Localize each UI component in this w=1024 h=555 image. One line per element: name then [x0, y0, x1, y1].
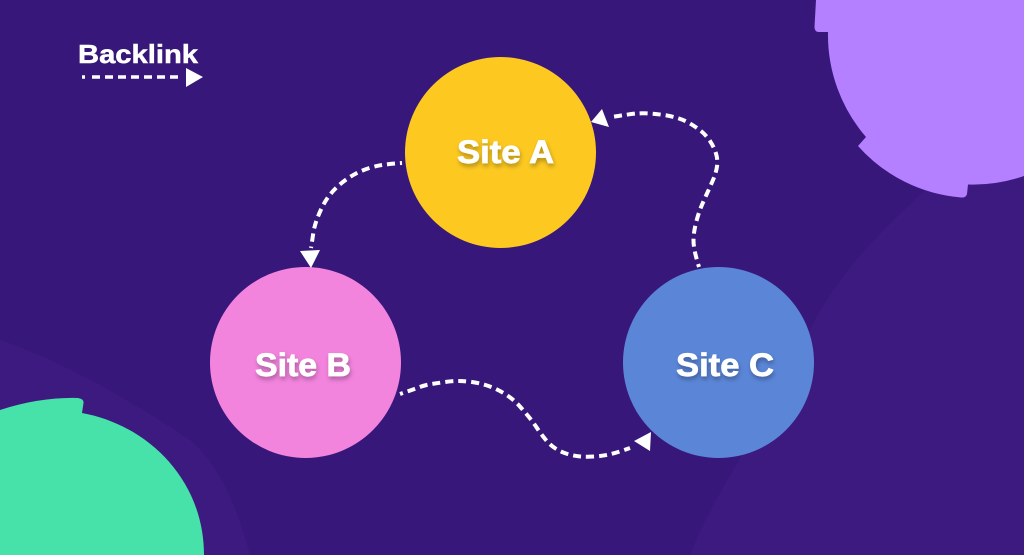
arrow: Site C to Site A	[591, 109, 717, 267]
arrow: Site B to Site C	[400, 381, 651, 457]
circle: Site C	[623, 267, 814, 458]
arrow: Site A to Site B	[300, 163, 402, 268]
circle: Site B	[210, 267, 401, 458]
label: Site C: Site C	[676, 347, 774, 383]
label: Site B: Site B	[255, 347, 351, 383]
legend: backlink	[78, 39, 203, 87]
background blob: lower left	[0, 340, 250, 555]
circle: Site A	[405, 57, 596, 248]
legend dashed arrow	[82, 68, 203, 87]
background blob: lower right	[690, 90, 1024, 555]
label: Site A: Site A	[457, 134, 554, 170]
legend title: Backlink	[78, 39, 199, 69]
purple corner shape	[814, 0, 1024, 198]
green corner shape	[0, 398, 204, 555]
